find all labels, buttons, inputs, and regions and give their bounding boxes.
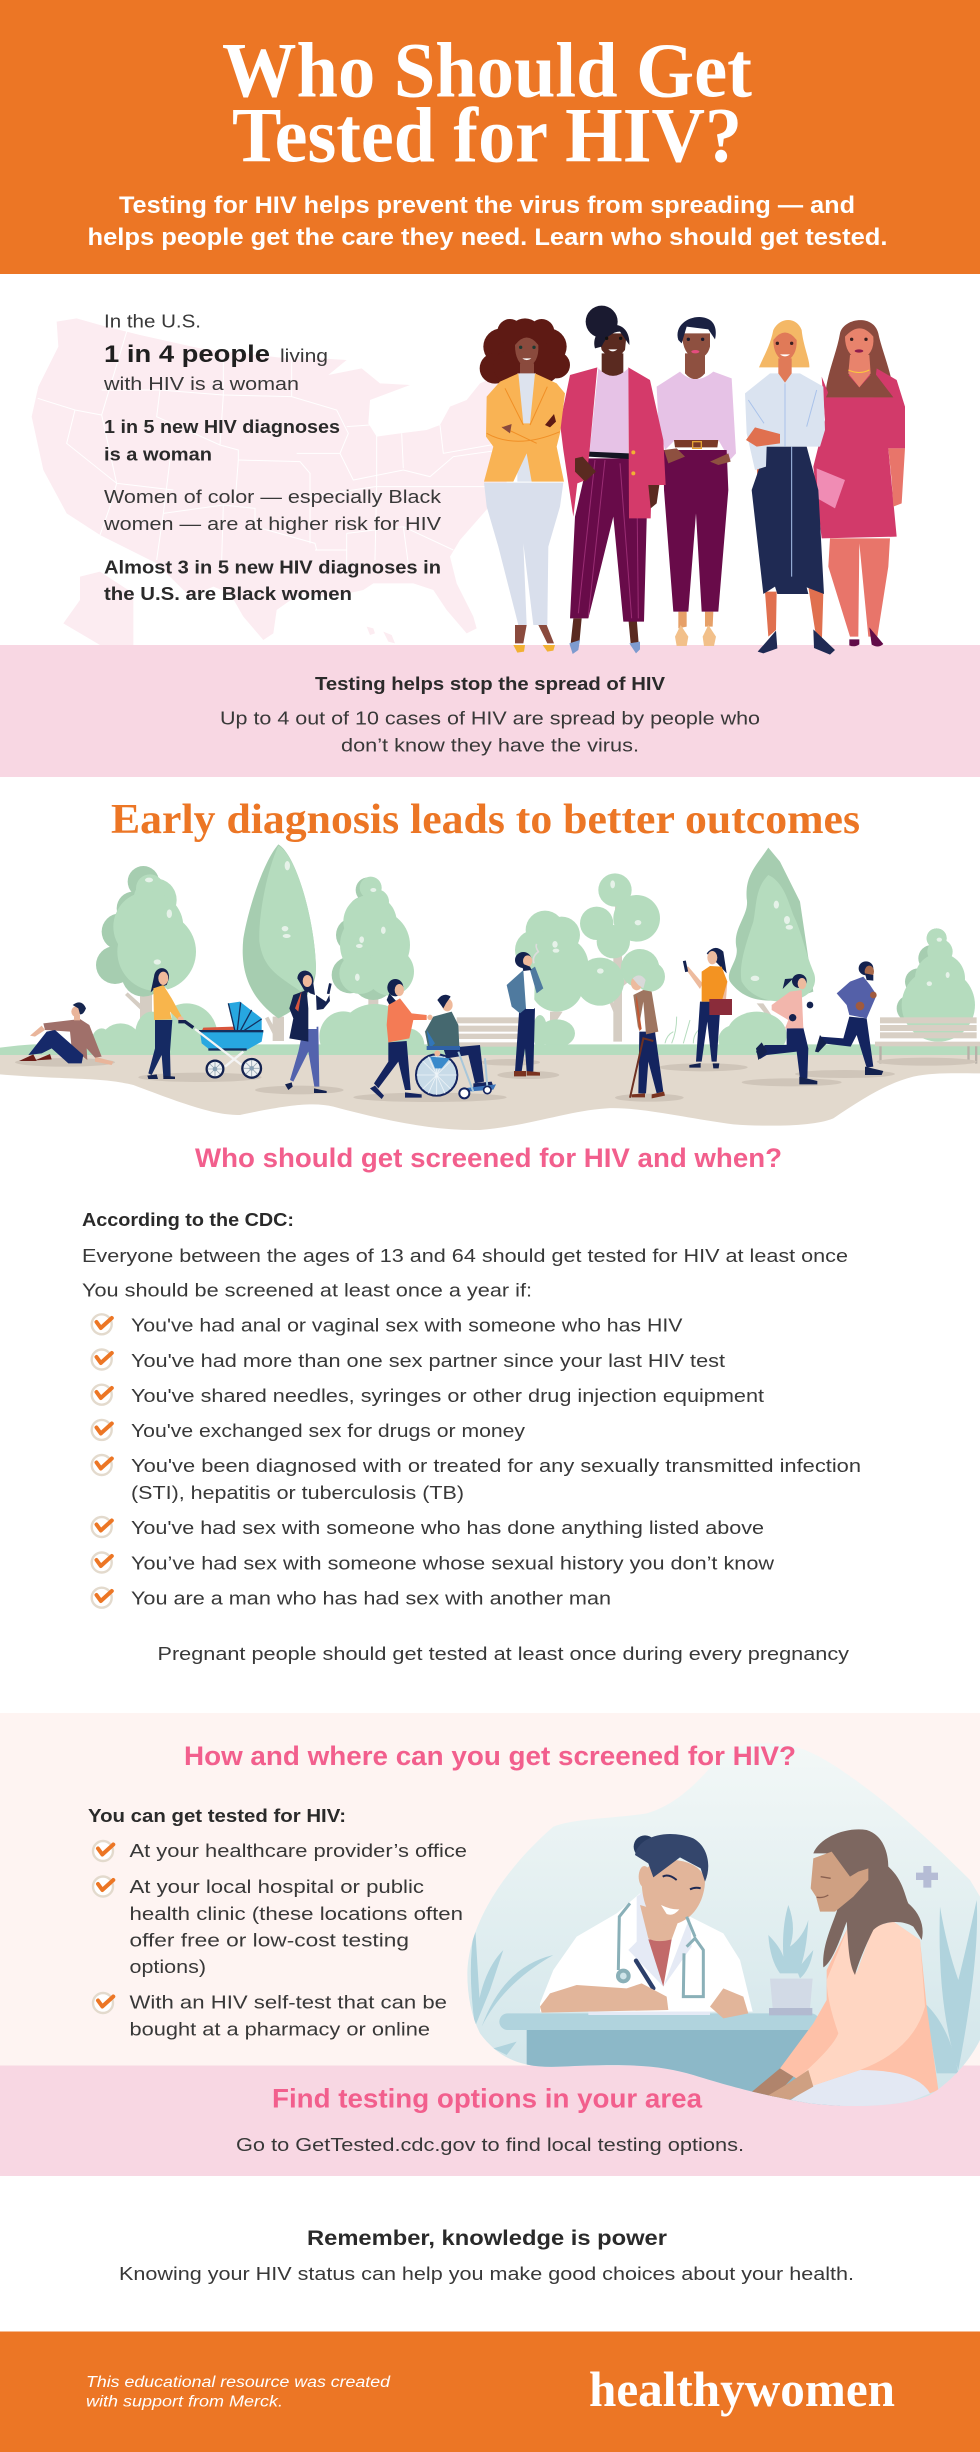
testing locations list: With an HIV self-test that can be bbox=[130, 1991, 447, 2012]
title: Tested for HIV? bbox=[232, 92, 742, 179]
knowledge is power text: Remember, knowledge is power bbox=[307, 2227, 667, 2250]
testing locations list: You can get tested for HIV: bbox=[88, 1805, 346, 1826]
medical cross bbox=[916, 1866, 938, 1888]
sponsor note: This educational resource was created bbox=[86, 2374, 392, 2391]
panel: how and where to get screened bbox=[0, 1713, 980, 2066]
checklist: You've had anal or vaginal sex with someone who has HIV bbox=[131, 1315, 683, 1336]
man in wheelchair bbox=[416, 995, 496, 1098]
testing locations list: options) bbox=[130, 1956, 206, 1977]
stats text: Women of color — especially Black bbox=[104, 486, 442, 507]
stats text: Almost 3 in 5 new HIV diagnoses in bbox=[104, 556, 441, 577]
stats text: In the U.S. bbox=[104, 311, 201, 332]
subtitle: Testing for HIV helps prevent the virus from spreading — and bbox=[119, 192, 855, 219]
CDC screening recommendations: You should be screened at least once a year if: bbox=[82, 1280, 532, 1300]
stats text: women — are at higher risk for HIV bbox=[103, 513, 442, 534]
stats text: 1 in 5 new HIV diagnoses bbox=[104, 416, 340, 437]
sponsor note bbox=[86, 2374, 392, 2410]
header panel bbox=[0, 0, 980, 274]
woman in lilac sweater and plum trousers bbox=[657, 317, 736, 646]
subtitle: helps people get the care they need. Learn who should get tested. bbox=[88, 224, 888, 251]
woman in pink dress bbox=[813, 320, 905, 647]
park scene illustration bbox=[0, 844, 980, 1130]
title bbox=[222, 27, 752, 179]
CDC screening recommendations: According to the CDC: bbox=[82, 1209, 294, 1230]
man smoking bbox=[507, 944, 543, 1076]
heading: who should get screened: Who should get screened for HIV and when? bbox=[195, 1143, 782, 1173]
testing locations list: offer free or low-cost testing bbox=[130, 1930, 409, 1950]
logo: healthywomen: healthywomen bbox=[589, 2361, 895, 2417]
man jogging bbox=[815, 961, 883, 1075]
checklist: You are a man who has had sex with another man bbox=[131, 1588, 611, 1609]
title: Who Should Get bbox=[222, 27, 752, 114]
woman in white shirt and navy skirt bbox=[745, 320, 835, 655]
sponsor note: with support from Merck. bbox=[86, 2394, 283, 2410]
testing locations list: health clinic (these locations often bbox=[130, 1903, 463, 1924]
baby stroller bbox=[178, 1002, 263, 1078]
heading: early diagnosis: Early diagnosis leads to better outcomes bbox=[111, 797, 860, 843]
footer bbox=[0, 2332, 980, 2452]
stats text: is a woman bbox=[104, 444, 212, 465]
person sitting on the ground bbox=[19, 1002, 113, 1065]
knowledge is power text: Knowing your HIV status can help you make good choices about your health. bbox=[119, 2263, 854, 2284]
woman with phone and book bbox=[683, 948, 732, 1068]
ground path bbox=[0, 1055, 980, 1130]
testing locations list: At your healthcare provider’s office bbox=[130, 1840, 467, 1861]
knowledge is power text bbox=[119, 2227, 854, 2284]
pink callout band bbox=[0, 645, 980, 777]
checklist bbox=[92, 1314, 861, 1609]
ground shadows bbox=[15, 1058, 977, 1102]
doctor bbox=[540, 1834, 753, 2018]
pregnant woman pushing wheelchair bbox=[370, 979, 433, 1099]
CDC screening recommendations bbox=[82, 1209, 861, 1664]
testing locations list: bought at a pharmacy or online bbox=[130, 2019, 430, 2040]
stats text: the U.S. are Black women bbox=[104, 583, 352, 604]
panel: find testing options bbox=[0, 2066, 980, 2176]
plants bbox=[471, 1900, 977, 2073]
CDC screening recommendations: Pregnant people should get tested at least once during every pregnancy bbox=[158, 1643, 850, 1664]
stats text: with HIV is a woman bbox=[103, 373, 299, 394]
desk bbox=[527, 2027, 840, 2110]
checklist: You've had more than one sex partner since your last HIV test bbox=[131, 1350, 725, 1371]
subtitle bbox=[88, 192, 888, 251]
testing locations list bbox=[88, 1805, 467, 2040]
woman walking with phone bbox=[285, 971, 332, 1093]
stats text bbox=[103, 311, 442, 604]
testing locations list: At your local hospital or public bbox=[130, 1876, 424, 1897]
checklist: You’ve had sex with someone whose sexual history you don’t know bbox=[131, 1552, 775, 1574]
find testing options text bbox=[236, 2084, 744, 2155]
benches bbox=[453, 1017, 980, 1064]
woman pushing a stroller bbox=[147, 968, 184, 1079]
woman in pink cardigan and striped trousers bbox=[560, 306, 666, 654]
pink callout band: don’t know they have the virus. bbox=[341, 735, 639, 756]
checklist: You've shared needles, syringes or other drug injection equipment bbox=[131, 1385, 764, 1406]
checklist: You've exchanged sex for drugs or money bbox=[131, 1420, 526, 1441]
illustration: doctor and patient bbox=[467, 1743, 980, 2110]
woman in yellow blazer and light trousers bbox=[480, 318, 570, 653]
pink callout band: Up to 4 out of 10 cases of HIV are spread by people who bbox=[220, 708, 760, 728]
pink callout band: Testing helps stop the spread of HIV bbox=[315, 673, 666, 694]
older man with cane bbox=[630, 975, 665, 1098]
trees and lawn bbox=[0, 844, 980, 1067]
checklist: You've had sex with someone who has done anything listed above bbox=[131, 1517, 764, 1538]
plant pot bbox=[770, 1979, 813, 2008]
find testing options text: Go to GetTested.cdc.gov to find local testing options. bbox=[236, 2134, 744, 2155]
illustration: group of five women bbox=[480, 306, 905, 655]
map of the U.S. bbox=[32, 318, 507, 645]
checklist: (STI), hepatitis or tuberculosis (TB) bbox=[131, 1482, 464, 1503]
heading: how and where: How and where can you get screened for HIV? bbox=[184, 1741, 796, 1771]
stats text: 1 in 4 people bbox=[104, 341, 270, 368]
stats text: living bbox=[280, 345, 328, 366]
find testing options text: Find testing options in your area bbox=[272, 2084, 703, 2114]
CDC screening recommendations: Everyone between the ages of 13 and 64 should get tested for HIV at least once bbox=[82, 1245, 848, 1266]
woman jogging bbox=[756, 974, 817, 1084]
checklist: You've been diagnosed with or treated for any sexually transmitted infection bbox=[131, 1455, 861, 1476]
patient bbox=[750, 1829, 938, 2108]
